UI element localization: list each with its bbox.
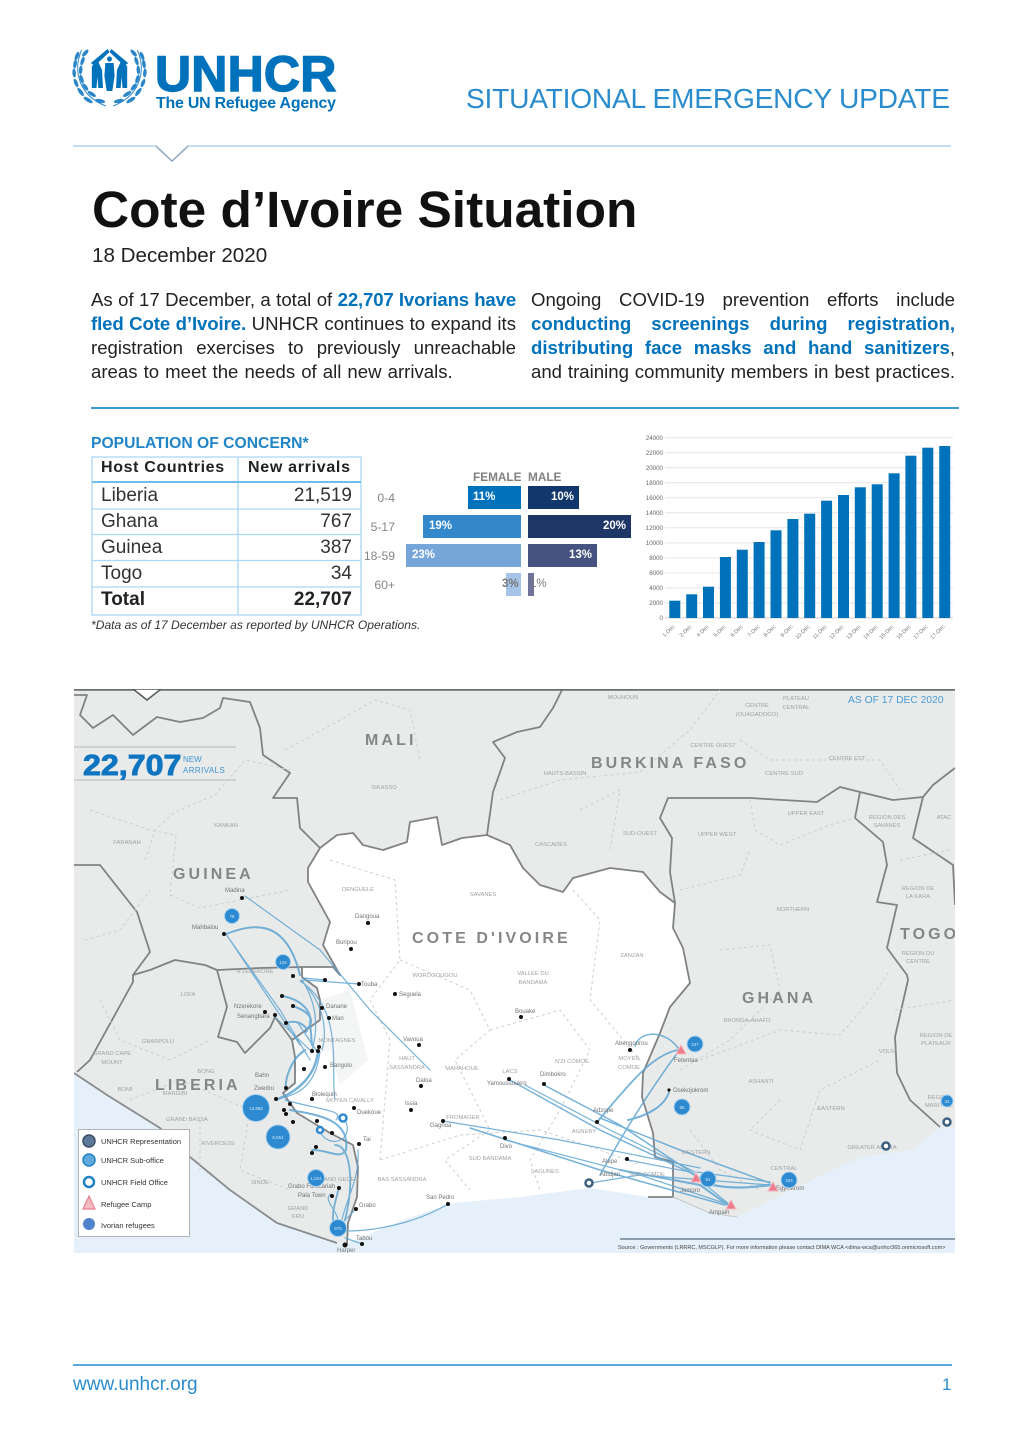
map: top border line xyxy=(74,689,955,691)
map: region labels: MOUNT xyxy=(101,1060,123,1066)
map: town labels: Mahbalou xyxy=(192,925,218,931)
map: legend: UNHCR Field Office xyxy=(101,1178,168,1187)
map: notch xyxy=(133,689,161,700)
map: flow lines xyxy=(226,896,770,1244)
chart date labels: 1-Dec xyxy=(662,624,677,639)
map: region labels: REGION DE xyxy=(920,1033,952,1039)
chart date labels: 9-Dec xyxy=(780,624,795,639)
intro text: left column: As of 17 December, a total of 22,707 Ivorians have xyxy=(91,289,516,310)
map: region labels: SUD-OUEST xyxy=(623,831,658,837)
table row: Liberia: 21,519 xyxy=(294,485,352,506)
chart gridlines and axis labels: 6000 xyxy=(649,570,664,577)
map: region labels: DENGUELE xyxy=(342,887,374,893)
table row: Ghana: 767 xyxy=(320,511,352,532)
map: region labels: MONTAGNES xyxy=(319,1038,356,1044)
map: region labels: (OUAGADOGO) xyxy=(736,712,778,718)
map: town labels: Zwedru xyxy=(254,1086,274,1092)
map: region labels: FROMAGER xyxy=(446,1115,480,1121)
map: region labels: HAUTS-BASSIN xyxy=(544,771,586,777)
document type heading: SITUATIONAL EMERGENCY UPDATE xyxy=(466,82,950,114)
row: 60+ xyxy=(374,573,547,596)
map: town labels: Alepe xyxy=(602,1159,618,1165)
map: town labels: Daloa xyxy=(416,1078,432,1084)
map: headline figure: 22,707 xyxy=(83,749,181,782)
map: region labels: MARAHOUE xyxy=(445,1066,479,1072)
map: circle values xyxy=(229,914,950,1231)
map: headline figure xyxy=(74,747,236,782)
table row: Liberia: Liberia xyxy=(101,485,158,506)
map: shaded border zone xyxy=(292,990,368,1085)
map: region labels: COMOE xyxy=(618,1065,640,1071)
chart date labels: 2-Dec xyxy=(679,624,694,639)
table header: Host Countries xyxy=(101,459,225,476)
map: region labels: CENTRE xyxy=(906,959,930,965)
map: legend: Ivorian refugees xyxy=(101,1221,155,1230)
map: country labels: GUINEA xyxy=(173,866,254,883)
chart gridlines and axis labels: 2000 xyxy=(649,600,664,607)
map: region labels: PLATEAU xyxy=(783,696,809,702)
map: region labels: BAS SASSANDRA xyxy=(378,1177,427,1183)
map: town labels: Danane xyxy=(326,1004,348,1010)
map: circle values: 975 xyxy=(334,1226,342,1231)
table row: Guinea: Guinea xyxy=(101,537,162,558)
map: region labels: MARGIBI xyxy=(163,1091,188,1097)
map: town labels: Tai xyxy=(363,1137,371,1143)
map: region labels: CENTRE OUEST xyxy=(690,743,736,749)
map: region labels: LACS xyxy=(502,1069,518,1075)
logo wordmark: UNHCR xyxy=(155,46,337,102)
chart gridlines and axis labels: 8000 xyxy=(649,555,664,562)
map: town labels: Abidjan xyxy=(600,1172,620,1178)
table row: Total xyxy=(101,589,352,610)
map: region labels: HAUT xyxy=(399,1056,415,1062)
row: 18-59 xyxy=(364,544,597,567)
map: region labels: SAVANES xyxy=(874,823,900,829)
map: town labels: Man xyxy=(332,1016,344,1022)
map: town labels: Bahn xyxy=(255,1073,269,1079)
map: circle values: 95 xyxy=(679,1105,685,1110)
chart date labels xyxy=(662,624,947,641)
map: region labels: LA KARA xyxy=(906,894,930,900)
map: towns xyxy=(222,896,671,1248)
map: region labels: GBARPOLU xyxy=(142,1039,174,1045)
date: 18 December 2020 xyxy=(92,244,267,267)
map: town labels: Tabou xyxy=(356,1236,372,1242)
age and sex pyramid chart xyxy=(364,470,631,596)
map: as-of date: AS OF 17 DEC 2020 xyxy=(848,695,944,706)
map: town labels: Harper xyxy=(337,1248,355,1254)
map: region labels: GREATER ACCRA xyxy=(847,1145,897,1151)
map: town labels: Jomoro xyxy=(680,1188,701,1194)
map: region labels: GRAND CAPE xyxy=(93,1051,131,1057)
map: town labels: Bouake xyxy=(515,1009,536,1015)
map: Cote d'Ivoire and neighbouring countries xyxy=(74,689,955,1253)
map: region labels: REGION DES xyxy=(869,815,905,821)
map: region labels: BRONGA-AHAFO xyxy=(723,1018,771,1024)
map: town labels: Dimbokro xyxy=(540,1072,566,1078)
map: region labels: SUD BANDAMA xyxy=(469,1156,511,1162)
map: office rings xyxy=(317,1114,950,1186)
row: 5-17: 19% xyxy=(429,520,452,532)
map: legend: UNHCR Representation xyxy=(101,1137,181,1146)
row: 5-17: 20% xyxy=(603,520,626,532)
map sea xyxy=(74,1073,955,1253)
map: town labels: Issia xyxy=(405,1101,418,1107)
table row: Liberia xyxy=(101,485,352,506)
intro text: right column: and training community members in best practices. xyxy=(531,361,955,382)
map: town labels: Nzerekore xyxy=(234,1004,262,1010)
map: region labels: WOROGOUGOU xyxy=(412,973,458,979)
intro text: right column: Ongoing COVID-19 prevention efforts include xyxy=(531,289,955,310)
chart date labels: 5-Dec xyxy=(713,624,728,639)
map: circle values: 334 xyxy=(785,1178,793,1183)
row: 60+: 1% xyxy=(530,578,547,590)
chart gridlines and axis labels: 0 xyxy=(660,615,664,622)
map: region labels: REGION DU xyxy=(902,951,934,957)
intro text: left column: fled Cote d’Ivoire. UNHCR continues to expand its xyxy=(91,313,516,334)
map: circle values: 134 xyxy=(279,960,287,965)
table row: Togo: Togo xyxy=(101,563,142,584)
map: region labels: ASHANTI xyxy=(748,1079,774,1085)
row: 0-4: 10% xyxy=(551,491,574,503)
row: 18-59: 13% xyxy=(569,549,592,561)
map: Cote d'Ivoire territory xyxy=(283,817,690,1245)
intro text: left column: registration exercises to previously unreachable xyxy=(91,337,516,358)
title: Cote d’Ivoire Situation xyxy=(92,180,637,238)
map: region labels: NORTHERN xyxy=(777,907,809,913)
map: town labels: Boripou xyxy=(336,940,357,946)
map: region labels: WESTERN xyxy=(682,1150,710,1156)
map: town labels: Osekojokrom xyxy=(673,1088,708,1094)
map: circle values: 1,024 xyxy=(310,1176,322,1181)
map: region labels: KRU xyxy=(292,1214,304,1220)
map: country labels: COTE D'IVOIRE xyxy=(412,930,571,947)
map: town labels: Abengourou xyxy=(615,1041,648,1047)
map: region labels: CENTRE xyxy=(745,703,769,709)
map: town labels: Divo xyxy=(500,1144,513,1150)
table row: Ghana: Ghana xyxy=(101,511,158,532)
row: 60+: 60+ xyxy=(374,578,395,592)
map: circle values: 6,551 xyxy=(272,1135,284,1140)
row: 18-59: 23% xyxy=(412,549,435,561)
map: region labels: RIVERCESS xyxy=(201,1141,235,1147)
map: town labels: Dangoua xyxy=(355,914,380,920)
map: circle values: 34 xyxy=(944,1099,950,1104)
row: 18-59: 18-59 xyxy=(364,549,395,563)
footer rule xyxy=(73,1364,952,1366)
chart gridlines and axis labels: 16000 xyxy=(646,495,664,502)
intro text: right column: conducting screenings during registration, xyxy=(531,313,955,334)
map: region labels: CENTRAL xyxy=(782,705,810,711)
header rule with chevron xyxy=(73,145,951,162)
chart gridlines and axis labels: 4000 xyxy=(649,585,664,592)
map: region labels: LOFA xyxy=(181,992,196,998)
map: town labels: Grabo xyxy=(359,1203,376,1209)
chart gridlines and axis labels: 24000 xyxy=(646,435,664,442)
map: region labels: UPPER EAST xyxy=(788,811,825,817)
map: region labels: SUD COMOE xyxy=(629,1172,665,1178)
intro text: left column xyxy=(91,289,516,382)
chart date labels: 8-Dec xyxy=(763,624,778,639)
chart gridlines and axis labels: 22000 xyxy=(646,450,664,457)
map: region labels: CENTRAL xyxy=(770,1166,798,1172)
map: region labels: FARANAH xyxy=(113,840,141,846)
map: legend: Refugee Camp xyxy=(101,1200,151,1209)
map: region labels: AGNEBY xyxy=(572,1129,596,1135)
map: region labels: MOYEN CAVALLY xyxy=(326,1098,374,1104)
map: town labels: Ampain xyxy=(709,1210,729,1216)
row: 5-17 xyxy=(371,515,631,538)
map: circle values: 247 xyxy=(691,1042,699,1047)
map: international borders xyxy=(74,690,955,1245)
table row: Togo: 34 xyxy=(331,563,352,584)
map: region labels: SAVANES xyxy=(470,892,496,898)
chart date labels: 7-Dec xyxy=(747,624,762,639)
map: refugee circles xyxy=(224,908,953,1236)
map: region labels: KANKAN xyxy=(214,823,238,829)
map: legend: UNHCR Sub-office xyxy=(101,1156,164,1165)
map: region labels: MOYEN xyxy=(618,1056,640,1062)
map: region labels: GRAND GEDEH xyxy=(315,1177,359,1183)
intro text: left column: areas to meet the needs of all new arrivals. xyxy=(91,361,453,382)
map: region labels: PLATEAUX xyxy=(921,1041,951,1047)
map: region labels: CENTRE EST xyxy=(829,756,866,762)
chart legend labels: FEMALE xyxy=(473,470,522,484)
table header: New arrivals xyxy=(248,459,351,476)
intro text: right column: distributing face masks and hand sanitizers, xyxy=(531,337,955,358)
map: country labels: MALI xyxy=(365,732,417,749)
map: country labels xyxy=(155,732,959,1094)
map: town labels: San Pedro xyxy=(426,1195,455,1201)
map: circle values: 91 xyxy=(705,1177,711,1182)
map: region labels: SINOE xyxy=(251,1180,269,1186)
map: town labels: Madina xyxy=(225,888,245,894)
map: region labels: SASSANDRA xyxy=(389,1065,425,1071)
map: region labels: N'ZEREKORE xyxy=(236,969,274,975)
table header xyxy=(101,459,351,476)
map: town labels: Seguela xyxy=(399,992,422,998)
age and sex pyramid chart: MALE xyxy=(528,470,561,484)
map: region labels xyxy=(93,695,953,1220)
map: region labels: MARITIME xyxy=(925,1103,953,1109)
map: region labels: N'ZI COMOE xyxy=(555,1059,589,1065)
map: town labels: Bangolo xyxy=(330,1063,353,1069)
chart gridlines and axis labels: 12000 xyxy=(646,525,664,532)
map: town labels: Gagnoa xyxy=(430,1123,452,1129)
footer page number: 1 xyxy=(942,1375,951,1394)
map: headline figure: NEW xyxy=(183,755,202,764)
map: country labels: BURKINA FASO xyxy=(591,755,749,772)
header logo xyxy=(72,46,337,112)
table footnote: *Data as of 17 December as reported by UNHCR Operations. xyxy=(91,618,420,632)
map: town labels xyxy=(192,888,804,1254)
map: town labels: Grabo Forecariah xyxy=(288,1184,335,1190)
map: region labels: REGION xyxy=(928,1095,950,1101)
map: region labels: EASTERN xyxy=(817,1106,845,1112)
map: town labels: Yamoussoukro xyxy=(487,1081,527,1087)
map: town labels: Adzope xyxy=(593,1108,614,1114)
chart gridlines and axis labels: 14000 xyxy=(646,510,664,517)
bar chart: cumulative arrivals xyxy=(646,435,953,640)
map: refugee camps xyxy=(676,1045,778,1209)
table row: Togo xyxy=(101,563,352,584)
table row: Guinea xyxy=(101,537,352,558)
map: source note: Source : Governments (LRRRC, MSCGLP). For more information please contact DIMA WCA <dima-wca@unhcr365.onmicrosoft.com> xyxy=(618,1245,945,1251)
table: host countries xyxy=(91,456,362,616)
map: region labels: BOMI xyxy=(118,1087,133,1093)
row: 0-4: 0-4 xyxy=(377,491,395,505)
map: region labels: CENTRE SUD xyxy=(765,771,803,777)
map: town labels: Senangbara xyxy=(237,1014,270,1020)
table grid xyxy=(91,456,362,616)
intro text: right column xyxy=(531,289,955,382)
map: country labels: LIBERIA xyxy=(155,1077,241,1094)
map: town labels: Touba xyxy=(361,982,378,988)
population of concern heading: POPULATION OF CONCERN* xyxy=(91,434,309,452)
chart gridlines and axis labels xyxy=(646,435,953,622)
map: region labels: VALLEE DU xyxy=(517,971,549,977)
table row: Total: 22,707 xyxy=(294,589,352,610)
icon: UNHCR emblem xyxy=(72,49,147,106)
map: headline figure: ARRIVALS xyxy=(183,766,225,775)
map: circle values: 75 xyxy=(229,914,235,919)
table row: Ghana xyxy=(101,511,352,532)
map: circle values: 13,892 xyxy=(249,1106,263,1111)
map: town labels: Blolequin xyxy=(312,1092,337,1098)
map land background xyxy=(74,689,955,1253)
map: town labels: Fetentaa xyxy=(674,1058,698,1064)
map: region labels: SIKASSO xyxy=(371,785,397,791)
chart gridlines and axis labels: 18000 xyxy=(646,480,664,487)
map: town labels: Vavoua xyxy=(403,1037,424,1043)
section rule xyxy=(91,407,959,409)
map: region labels: ATAC xyxy=(937,815,951,821)
row: 0-4: 11% xyxy=(473,491,495,503)
map: region labels: MOUHOUN xyxy=(608,695,638,701)
footer website: www.unhcr.org xyxy=(73,1374,198,1395)
chart gridlines and axis labels: 20000 xyxy=(646,465,664,472)
map: region labels: BONG xyxy=(197,1069,215,1075)
map: town labels: Egyeikrom xyxy=(776,1186,804,1192)
chart date labels: 6-Dec xyxy=(730,624,745,639)
map: region labels: VOLTA xyxy=(879,1049,897,1055)
map: region labels: BANDAMA xyxy=(519,980,547,986)
table row: Total: Total xyxy=(101,589,145,610)
chart gridlines and axis labels: 10000 xyxy=(646,540,664,547)
row: 60+: 3% xyxy=(502,578,519,590)
map: region labels: LAGUNES xyxy=(531,1169,559,1175)
row: 5-17: 5-17 xyxy=(371,520,395,534)
map: country labels: GHANA xyxy=(742,990,816,1007)
map: admin boundaries xyxy=(85,690,955,1190)
map: town labels: Pala Town xyxy=(298,1193,326,1199)
map: region labels: ZANZAN xyxy=(620,953,644,959)
chart date labels: 4-Dec xyxy=(696,624,711,639)
map: town labels: Duekoue xyxy=(357,1110,382,1116)
map: region labels: GRAND xyxy=(288,1206,308,1212)
map: region labels: CASCADES xyxy=(535,842,567,848)
map: region labels: REGION DE xyxy=(902,886,934,892)
row: 0-4 xyxy=(377,486,579,509)
logo tagline: The UN Refugee Agency xyxy=(156,95,336,112)
map: legend xyxy=(78,1130,190,1236)
map: region labels: GRAND BASSA xyxy=(166,1117,208,1123)
table row: Guinea: 387 xyxy=(320,537,352,558)
chart bars xyxy=(669,446,950,618)
map: region labels: UPPER WEST xyxy=(698,832,737,838)
